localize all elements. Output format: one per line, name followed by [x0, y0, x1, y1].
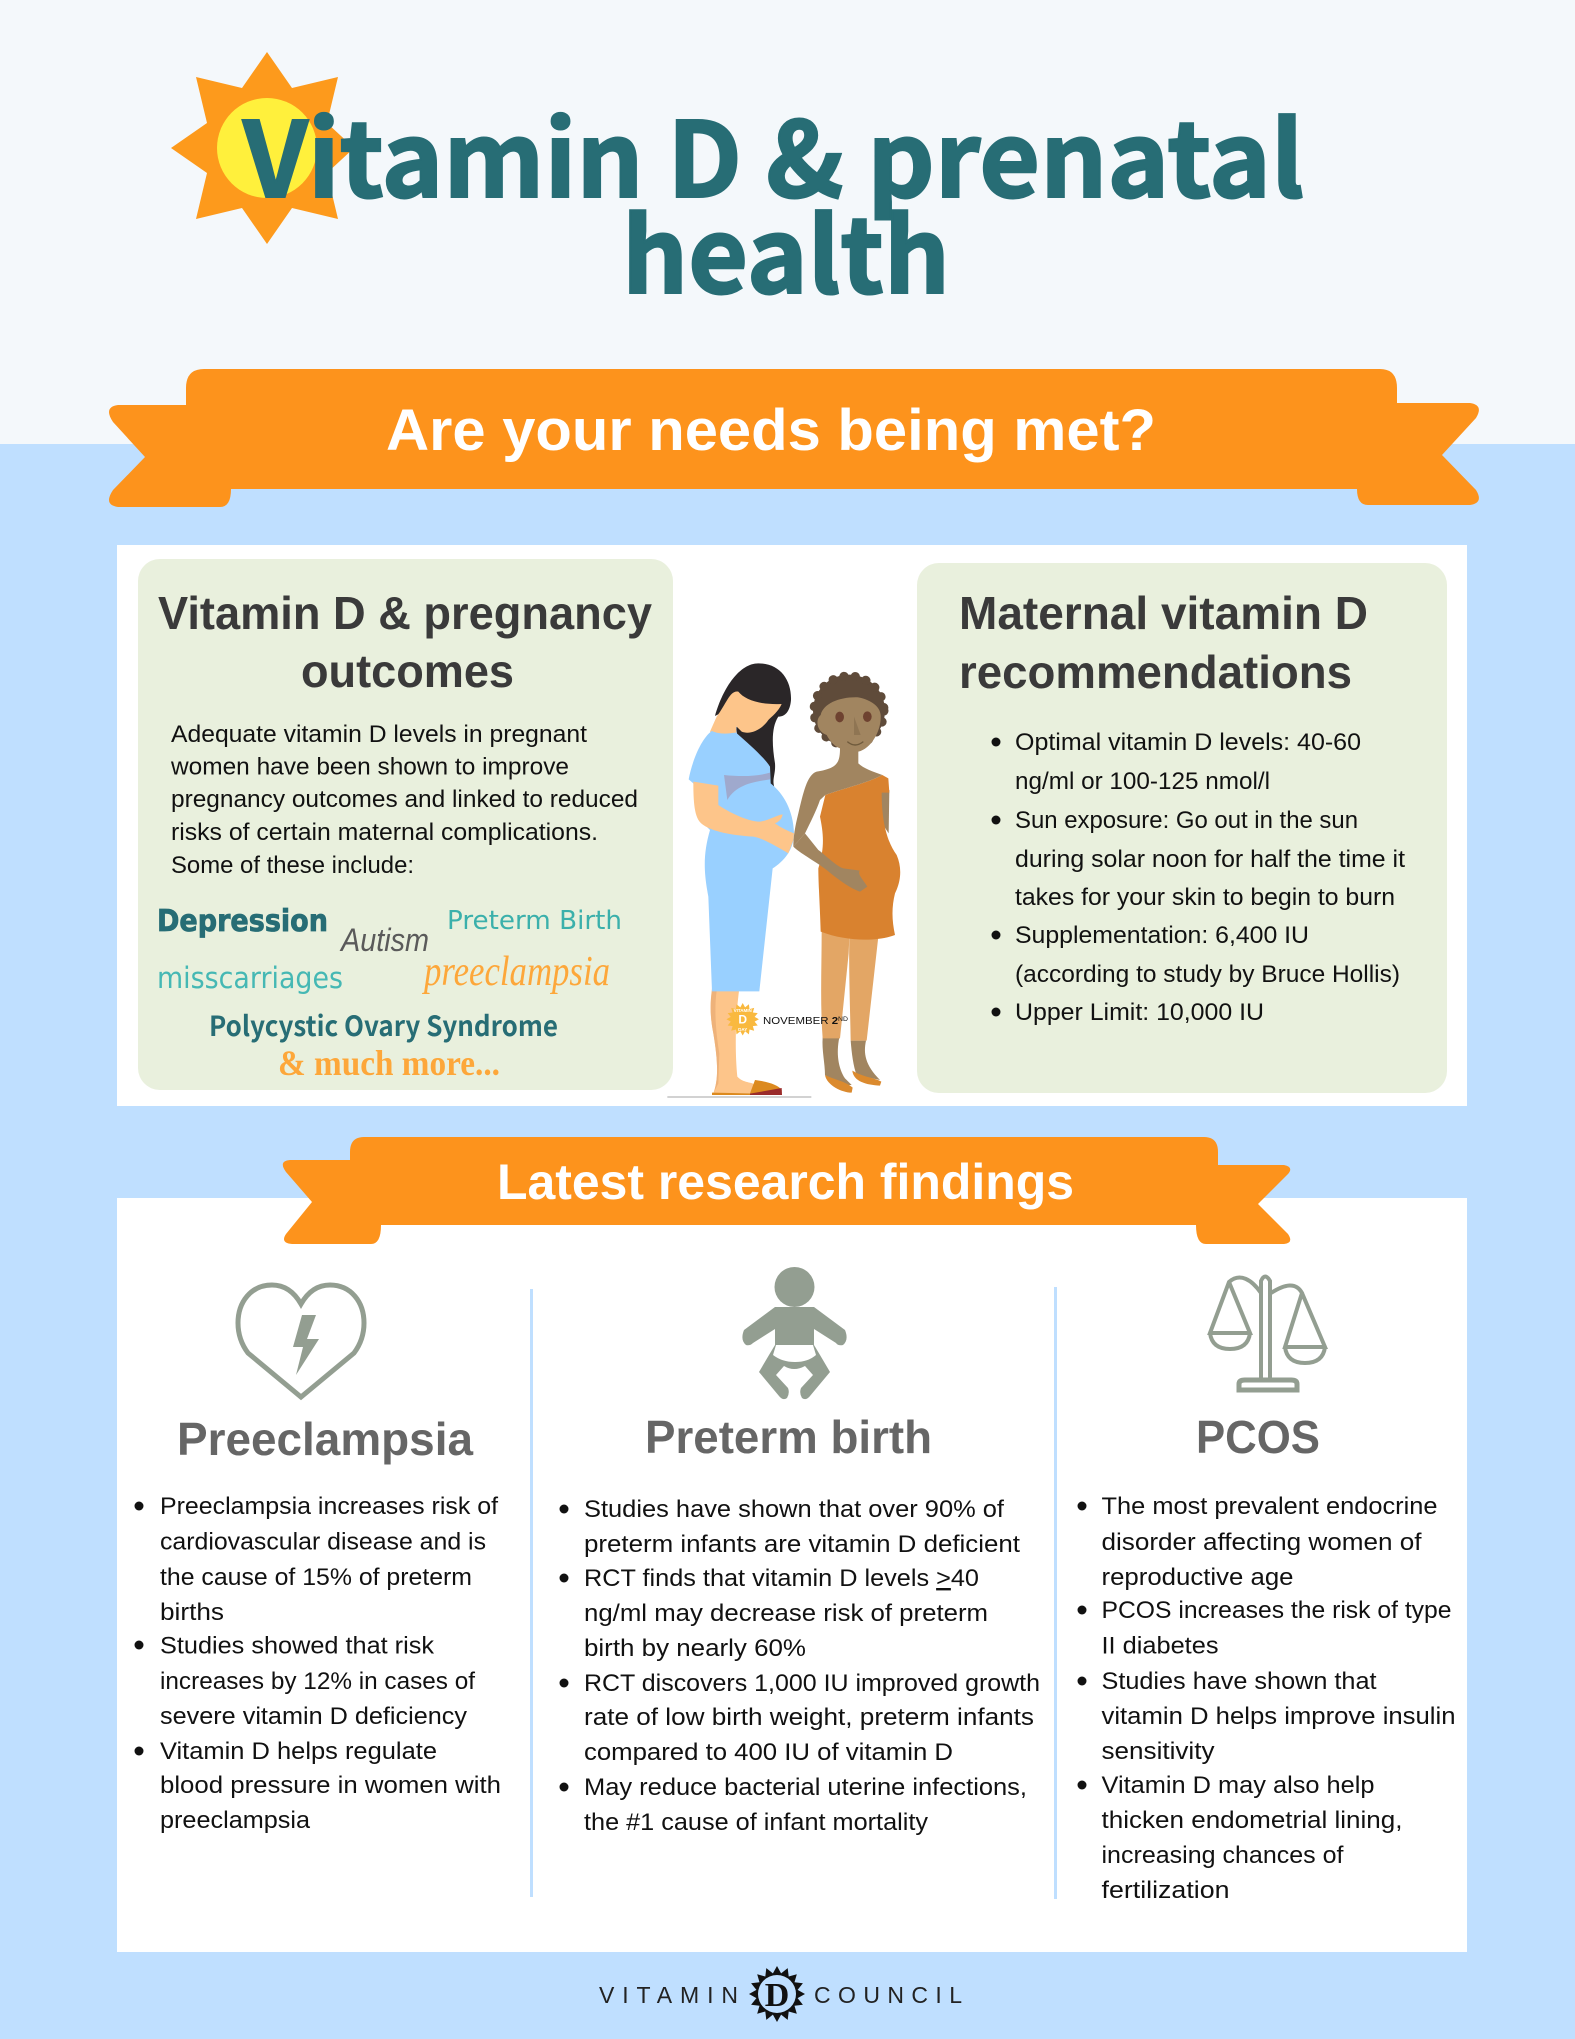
list: preterm birth: May reduce bacterial uterine infections, — [584, 1774, 1027, 1801]
logo: Vitamin D Council: VITAMIN — [599, 1982, 738, 2008]
list: recommendations: Sun exposure: Go out in the sun — [1015, 807, 1358, 834]
list: recommendations: (according to study by Bruce Hollis) — [1015, 961, 1400, 988]
list: preterm birth: the #1 cause of infant mortality — [584, 1809, 928, 1836]
list: PCOS: thicken endometrial lining, — [1102, 1807, 1402, 1834]
list: preeclampsia: Studies showed that risk — [160, 1632, 435, 1660]
badge: vitamin day — [726, 1003, 849, 1036]
list: PCOS: disorder affecting women of — [1102, 1529, 1422, 1556]
heading: recommendations: recommendations — [959, 646, 1352, 698]
heading: preterm birth: Preterm birth — [645, 1411, 932, 1463]
word cloud: complications: Polycystic Ovary Syndrome — [209, 1005, 558, 1045]
heading: recommendations — [959, 587, 1368, 698]
icon: sun — [171, 52, 354, 244]
word cloud: complications: preeclampsia — [422, 949, 610, 995]
title — [242, 76, 1304, 323]
column: PCOS — [1078, 1276, 1456, 1904]
banner: latest research findings — [283, 1137, 1290, 1244]
text block: intro: Adequate vitamin D levels in pregnant — [171, 721, 587, 748]
list: preterm birth: birth by nearly 60% — [584, 1635, 806, 1662]
word cloud: complications: Autism — [339, 922, 429, 958]
icon: baby — [742, 1267, 847, 1399]
heading: pregnancy outcomes: outcomes — [301, 645, 514, 697]
list: recommendations: Optimal vitamin D levels: 40-60 — [1015, 729, 1361, 756]
text block: intro: women have been shown to improve — [170, 754, 569, 780]
list: preeclampsia: severe vitamin D deficiency — [160, 1703, 467, 1730]
heading: preeclampsia: Preeclampsia — [177, 1413, 473, 1465]
list: recommendations: Upper Limit: 10,000 IU — [1015, 999, 1264, 1026]
banner: are your needs being met — [109, 369, 1479, 507]
list: PCOS: vitamin D helps improve insulin — [1102, 1703, 1456, 1730]
list: preeclampsia: Preeclampsia increases risk of — [160, 1493, 498, 1520]
list: preterm birth: ng/ml may decrease risk of preterm — [584, 1600, 988, 1627]
icon: heart with bolt — [238, 1285, 364, 1397]
badge: vitamin day: NOVEMBER 2 — [763, 1016, 837, 1027]
word cloud: complications: & much more... — [278, 1043, 500, 1083]
text block: intro: pregnancy outcomes and linked to reduced — [171, 786, 638, 813]
column: preeclampsia — [134, 1285, 501, 1834]
panel: needs white card — [117, 545, 1467, 1106]
list: PCOS: Studies have shown that — [1102, 1668, 1377, 1695]
list: recommendations: takes for your skin to begin to burn — [1015, 884, 1395, 911]
text block: intro: risks of certain maternal complications. — [171, 819, 598, 846]
list: preeclampsia — [134, 1493, 501, 1834]
list: PCOS: Vitamin D may also help — [1102, 1772, 1374, 1799]
list: preeclampsia: cardiovascular disease and is — [160, 1528, 486, 1556]
list: preeclampsia: increases by 12% in cases of — [160, 1668, 475, 1695]
illustration: two pregnant women — [667, 663, 900, 1097]
list: PCOS: increasing chances of — [1102, 1842, 1344, 1869]
badge: vitamin day: ND — [838, 1017, 849, 1023]
heading: pregnancy outcomes: Vitamin D & pregnancy — [158, 587, 652, 639]
list: preeclampsia: blood pressure in women with — [160, 1772, 501, 1799]
list: preeclampsia: preeclampsia — [160, 1807, 311, 1834]
banner: are your needs being met: Are your needs being met? — [386, 398, 1156, 463]
logo: Vitamin D Council — [599, 1966, 962, 2022]
logo: Vitamin D Council: D — [765, 1977, 789, 2014]
text block: intro — [170, 721, 638, 879]
word cloud: complications: Depression — [157, 904, 328, 939]
list: recommendations — [992, 729, 1405, 1026]
list: PCOS: II diabetes — [1102, 1632, 1218, 1660]
badge: vitamin day: D — [738, 1012, 747, 1026]
list: PCOS: PCOS increases the risk of type — [1102, 1597, 1452, 1624]
list: preterm birth: Studies have shown that over 90% of — [584, 1496, 1004, 1523]
heading: recommendations: Maternal vitamin D — [959, 587, 1368, 639]
list: preterm birth: RCT discovers 1,000 IU improved growth — [584, 1670, 1040, 1697]
list: preeclampsia: the cause of 15% of preterm — [160, 1564, 472, 1591]
column: preterm birth — [560, 1267, 1040, 1836]
word cloud: complications: misscarriages — [157, 961, 343, 995]
panel: maternal vitamin D recommendations — [917, 563, 1447, 1093]
panel: vitamin D and pregnancy outcomes — [138, 559, 673, 1090]
heading: PCOS: PCOS — [1196, 1411, 1320, 1463]
title: Vitamin D & prenatal — [242, 76, 1304, 227]
word cloud: complications — [157, 904, 622, 1083]
list: preterm birth — [560, 1496, 1040, 1836]
list: preterm birth: compared to 400 IU of vitamin D — [584, 1739, 953, 1766]
list: preeclampsia: births — [160, 1599, 224, 1626]
icon: scales — [1210, 1276, 1325, 1390]
list: preterm birth: RCT finds that vitamin D levels >40 — [584, 1565, 979, 1592]
list: PCOS: The most prevalent endocrine — [1102, 1493, 1438, 1520]
panel: research findings white card — [117, 1198, 1467, 1952]
badge: vitamin day: VITAMIN — [734, 1008, 752, 1013]
word cloud: complications: Preterm Birth — [447, 906, 622, 936]
banner: latest research findings: Latest research findings — [497, 1154, 1074, 1210]
list: recommendations: ng/ml or 100-125 nmol/l — [1015, 768, 1270, 795]
heading: pregnancy outcomes — [158, 587, 652, 697]
list: PCOS: fertilization — [1102, 1877, 1230, 1904]
list: preterm birth: rate of low birth weight, preterm infants — [584, 1704, 1034, 1731]
logo: Vitamin D Council: COUNCIL — [814, 1982, 962, 2008]
list: recommendations: Supplementation: 6,400 IU — [1015, 922, 1309, 949]
list: PCOS: sensitivity — [1102, 1738, 1214, 1765]
list: PCOS — [1078, 1493, 1456, 1904]
list: preeclampsia: Vitamin D helps regulate — [160, 1738, 437, 1765]
title: health — [622, 172, 950, 323]
text block: intro: Some of these include: — [171, 852, 414, 879]
list: preterm birth: preterm infants are vitamin D deficient — [584, 1531, 1020, 1558]
list: recommendations: during solar noon for half the time it — [1015, 846, 1405, 873]
list: PCOS: reproductive age — [1102, 1564, 1294, 1591]
badge: vitamin day: DAY — [738, 1027, 747, 1032]
